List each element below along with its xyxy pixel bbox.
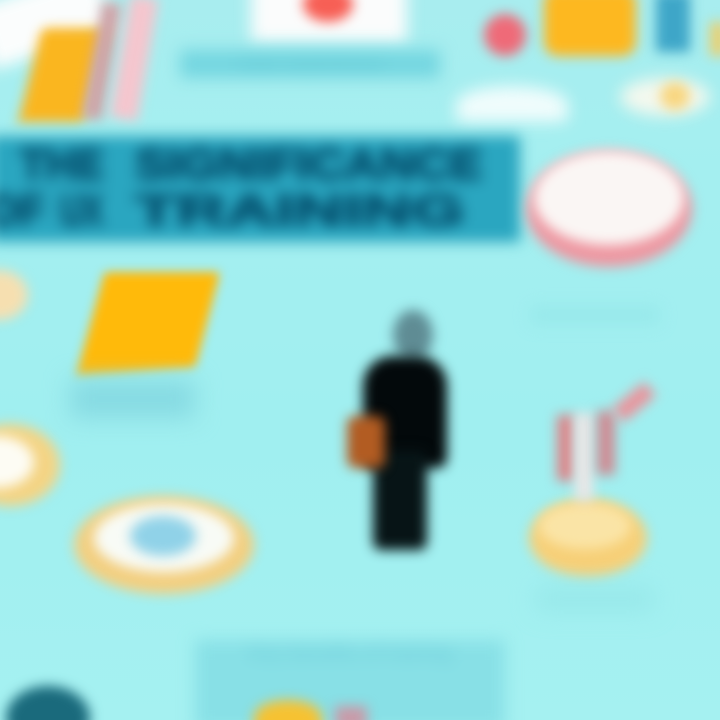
top card with red circle xyxy=(242,0,416,49)
top right icons xyxy=(448,0,720,132)
central figure: person with bag xyxy=(336,302,458,560)
round badge xyxy=(517,142,700,275)
title banner: UX xyxy=(60,186,103,235)
left edge coin upper xyxy=(0,270,28,320)
bottom small pink icon xyxy=(335,706,367,720)
title banner: TRAINING xyxy=(135,186,465,235)
yellow diamond card xyxy=(70,264,226,382)
top caption: User experience xyxy=(237,53,383,75)
top illustration: books and pencils xyxy=(0,0,164,131)
title banner: SIGNIFICANCE xyxy=(135,140,482,189)
bottom text panel xyxy=(195,640,505,720)
title banner: THE xyxy=(20,140,104,189)
badge caption xyxy=(530,305,660,325)
card shadow xyxy=(70,380,195,418)
bottom left coin target xyxy=(66,488,262,602)
pedestal shadow xyxy=(535,585,655,613)
title banner xyxy=(0,125,530,252)
bottom yellow icon xyxy=(254,700,322,720)
top caption xyxy=(180,50,440,78)
left edge coin lower xyxy=(0,416,68,514)
bottom left dark circle xyxy=(6,686,90,720)
bottom text panel: Key benefits of training xyxy=(248,642,452,664)
right pedestal with chart flags xyxy=(520,377,660,585)
